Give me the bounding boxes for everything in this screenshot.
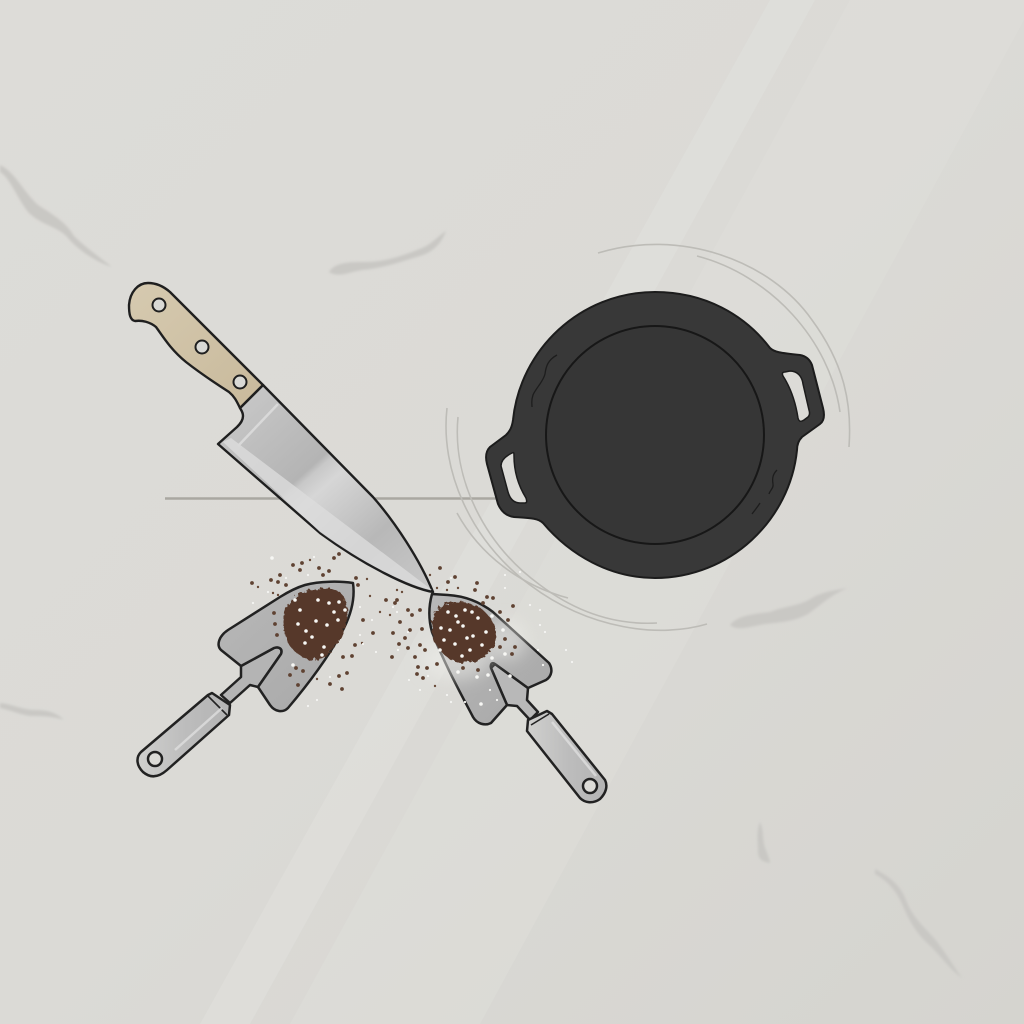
- chef knife: [129, 283, 433, 592]
- small white dust specks: [253, 557, 572, 706]
- right trowel handle highlight: [552, 722, 596, 776]
- scattered brown soil particles: [252, 554, 515, 689]
- blade highlight: [238, 404, 278, 446]
- left trowel handle: [137, 693, 230, 776]
- scratch line: [165, 497, 500, 500]
- right garden trowel: [429, 594, 606, 802]
- pan inner cooking surface: [546, 326, 764, 544]
- knife handle: [129, 283, 263, 408]
- left trowel blade: [219, 582, 354, 711]
- soil pile on left trowel: [284, 588, 348, 660]
- right trowel tang: [491, 664, 538, 720]
- knife rivets: [152, 298, 246, 388]
- soil pile on right trowel: [432, 602, 496, 663]
- small brown specks: [258, 560, 458, 686]
- knife blade: [218, 385, 433, 592]
- surface cracks: [0, 165, 962, 978]
- right trowel collar: [531, 714, 549, 725]
- pan body with handles: [486, 292, 824, 578]
- right trowel handle hole: [583, 779, 597, 793]
- right trowel blade: [429, 594, 551, 724]
- right trowel handle: [527, 711, 606, 802]
- pan surface wear marks: [532, 355, 777, 514]
- white dust haze: [420, 620, 527, 680]
- pan handle hole fills: [501, 371, 810, 503]
- left trowel handle highlight: [175, 708, 222, 750]
- left garden trowel: [137, 582, 354, 776]
- left trowel handle hole: [148, 752, 162, 766]
- motion arcs around pan: [446, 244, 850, 630]
- cast iron pan: [486, 292, 824, 578]
- knife edge bevel: [223, 438, 432, 590]
- left trowel collar: [208, 696, 227, 715]
- left trowel tang: [221, 647, 282, 703]
- white salt specks: [272, 558, 510, 704]
